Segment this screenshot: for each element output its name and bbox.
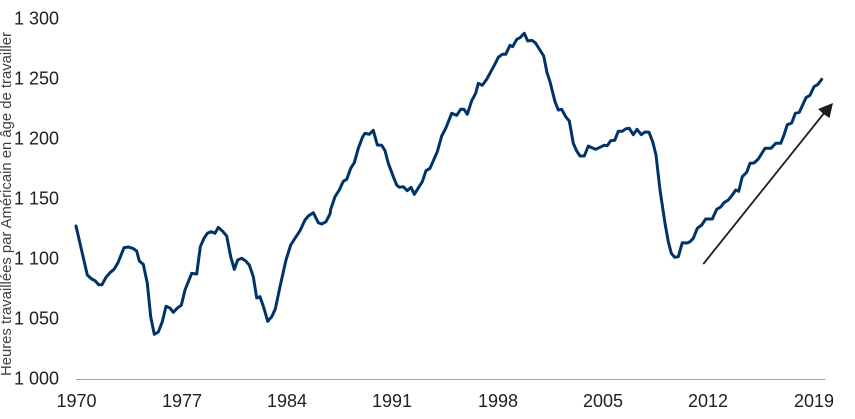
x axis line (76, 378, 826, 380)
y axis labels: 1 100 (14, 248, 59, 268)
x axis labels: 1970 (56, 391, 97, 411)
x axis labels: 2012 (688, 391, 728, 411)
x axis labels: 2005 (583, 391, 623, 411)
x axis labels: 2019 (794, 391, 834, 411)
y axis labels (14, 8, 59, 388)
y axis labels: 1 000 (14, 368, 59, 388)
x axis labels: 1998 (478, 391, 518, 411)
y axis labels: 1 300 (14, 8, 59, 28)
y axis labels: 1 250 (14, 68, 59, 88)
y axis labels: 1 050 (14, 308, 59, 328)
x axis labels: 1984 (267, 391, 307, 411)
y axis labels: 1 200 (14, 128, 59, 148)
x axis labels: 1991 (372, 391, 412, 411)
x axis labels (56, 391, 834, 411)
y axis labels: 1 150 (14, 188, 59, 208)
data line: hours worked per working-age American (76, 33, 822, 334)
arrow: upward trend (703, 103, 833, 264)
x axis labels: 1977 (162, 391, 202, 411)
